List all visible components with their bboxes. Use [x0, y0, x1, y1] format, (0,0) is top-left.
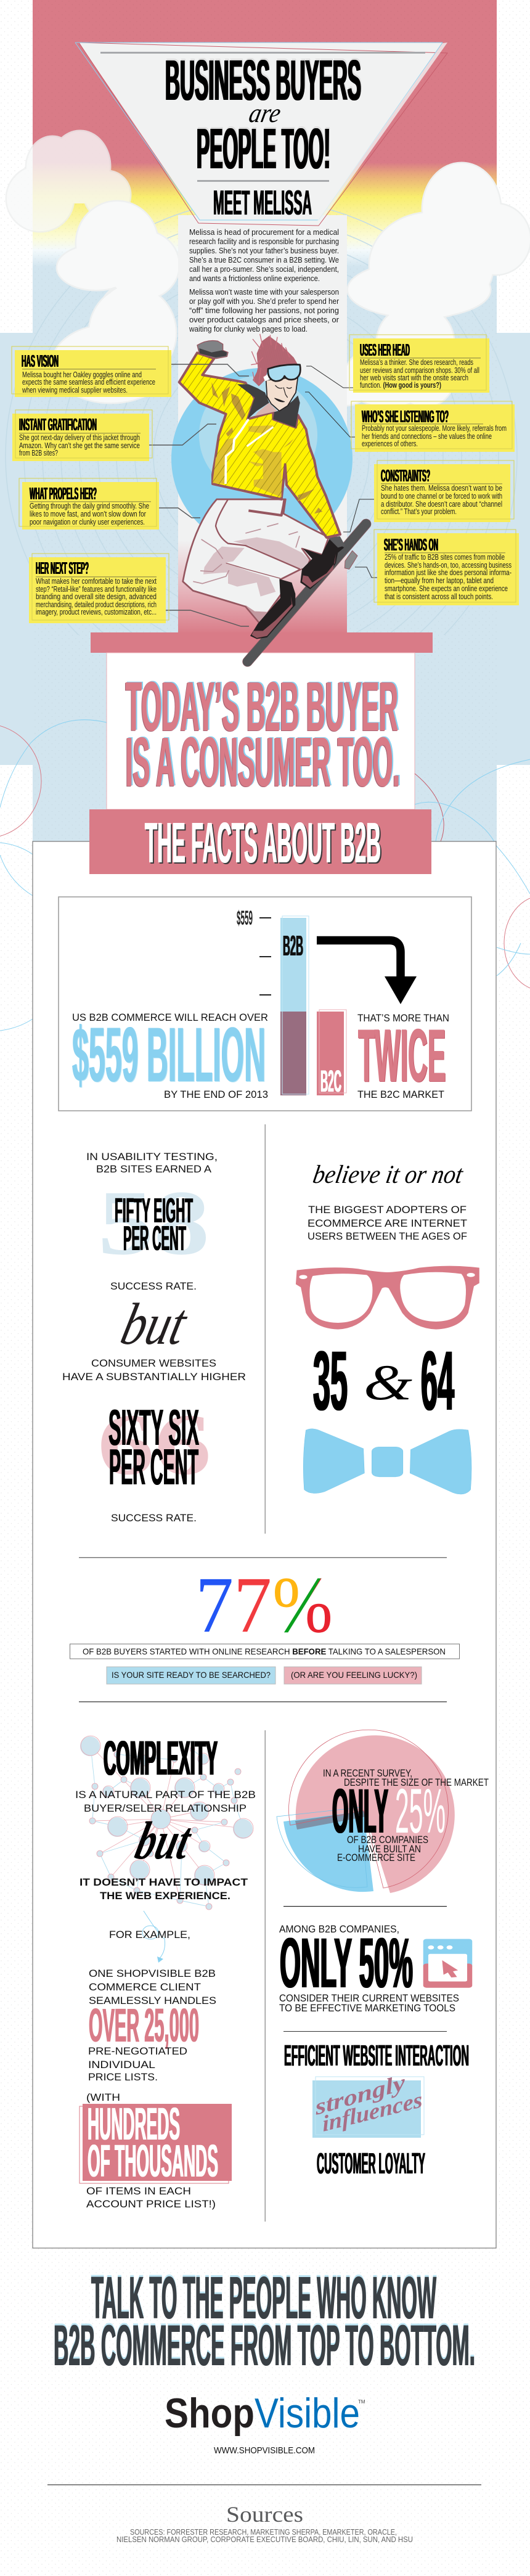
- callout: she's hands on: SHE’S HANDS ON: [384, 535, 438, 554]
- sources: Sources: [226, 2502, 303, 2527]
- title rule top: [100, 52, 425, 54]
- stat right: THAT’S MORE THAN: [357, 1012, 449, 1024]
- text: complexity: IT DOESN’T HAVE TO IMPACT: [80, 1876, 248, 1888]
- callout: instant gratification: She got next-day delivery of this jacket through: [19, 433, 140, 442]
- title: business buyers are people too: are: [247, 97, 283, 128]
- pie text: IN A RECENT SURVEY,: [323, 1767, 412, 1779]
- goggles: [268, 364, 300, 381]
- callout: uses her head: Melissa’s a thinker. She does research, reads: [360, 358, 473, 367]
- left lower clouds: [52, 202, 179, 403]
- text: complexity: [75, 1730, 256, 1902]
- callout: uses her head: USES HER HEAD: [360, 340, 410, 359]
- stat: only 50 percent: CONSIDER THEIR CURRENT WEBSITES: [279, 1992, 459, 2004]
- intro text: call her a pro-sumer. She’s social, independent,: [189, 264, 339, 274]
- callout: her next step: What makes her comfortable to take the next: [36, 577, 157, 586]
- text: complexity: THE WEB EXPERIENCE.: [100, 1890, 230, 1902]
- icon: bow tie: [303, 1429, 471, 1494]
- callout: has vision: expects the same seamless and efficient experience: [22, 378, 155, 386]
- panel: strongly influences: influences: [322, 2087, 423, 2136]
- intro text: [189, 227, 340, 333]
- stat: usability testing: IN USABILITY TESTING,: [86, 1151, 218, 1163]
- axis labels and ticks: $559: [237, 907, 253, 929]
- text: OVER 25,000: [89, 1999, 199, 2052]
- stat: usability testing: FIFTY EIGHT: [115, 1191, 193, 1230]
- stat: adopters: USERS BETWEEN THE AGES OF: [308, 1230, 467, 1242]
- callout: her next step: step? “Retail-like” features and functionality like: [36, 585, 157, 594]
- stat: usability testing: B2B SITES EARNED A: [96, 1163, 212, 1175]
- text: OF THOUSANDS: [88, 2135, 218, 2186]
- rule right lower: [283, 2031, 447, 2032]
- sources: SOURCES: FORRESTER RESEARCH, MARKETING SHERPA, EMARKETER, ORACLE,: [130, 2527, 397, 2537]
- facts panel: [33, 841, 496, 2248]
- callout: who's she listening to: experiences of others.: [362, 440, 418, 448]
- face: [263, 374, 298, 411]
- panel: strongly influences: [312, 2069, 424, 2138]
- right clouds: [320, 163, 530, 407]
- stat: usability testing: SIXTY SIX: [108, 1399, 199, 1456]
- stat: usability testing: PER CENT: [109, 1438, 198, 1495]
- stat: usability testing: SUCCESS RATE.: [111, 1512, 197, 1524]
- intro text: “off” time following her passions, not poring: [189, 306, 339, 315]
- intro text: Melissa is head of procurement for a medical: [189, 227, 339, 237]
- divider lower: [265, 1730, 266, 2222]
- research caption box: OF B2B BUYERS STARTED WITH ONLINE RESEARCH BEFORE TALKING TO A SALESPERSON: [83, 1646, 446, 1656]
- stat: adopters: THE BIGGEST ADOPTERS OF: [308, 1204, 467, 1216]
- callout: has vision: Melissa bought her Oakley goggles online and: [22, 370, 142, 379]
- button: searched: [107, 1667, 275, 1684]
- ages number: [313, 1334, 454, 1428]
- text: example: FOR EXAMPLE,: [109, 1929, 190, 1940]
- intro text: waiting for clunky web pages to load.: [189, 324, 308, 333]
- text: account lists: [86, 2185, 216, 2210]
- callout: constraints: conflict.” That’s your problem.: [381, 507, 457, 516]
- stat: 77 percent: 7: [234, 1561, 272, 1650]
- pie text: HAVE BUILT AN: [358, 1843, 421, 1855]
- panel: chart b2b vs b2c: B2B: [283, 930, 303, 962]
- b2c bar: [317, 1010, 346, 1098]
- rule between sections: [79, 1701, 447, 1703]
- callout: uses her head: her web visits start with the onsite search: [360, 374, 468, 382]
- callout: what propels her: WHAT PROPELS HER?: [30, 484, 97, 503]
- intro text: supplies. She’s not your father’s business buyer.: [189, 246, 339, 255]
- icon: browser window: [423, 1939, 472, 1988]
- callout: instant gratification: from B2B sites?: [19, 449, 58, 457]
- pants: [183, 499, 328, 624]
- callout: she's hands on: [374, 530, 519, 605]
- text: example: COMMERCE CLIENT: [89, 1981, 201, 1993]
- intro text: research facility and is responsible for purchasing: [189, 237, 339, 246]
- figure: snowboarder: [179, 334, 366, 661]
- title trapezoid: [75, 43, 447, 226]
- neck: [255, 403, 277, 416]
- icon: glasses: [296, 1266, 479, 1330]
- stat: adopters: believe it or not: [311, 1160, 466, 1189]
- text: example: PRE-NEGOTIATED: [88, 2045, 187, 2057]
- callout: her next step: imagery, product reviews, customization, etc...: [36, 608, 157, 616]
- rule right upper: [283, 1906, 447, 1907]
- callout: what propels her: [19, 478, 159, 530]
- callout: her next step: branding and overall site design, advanced: [36, 592, 157, 601]
- callout: has vision: [12, 346, 171, 397]
- text: example: (WITH: [86, 2091, 120, 2103]
- closing headline: [54, 2262, 475, 2378]
- website url: WWW.SHOPVISIBLE.COM: [214, 2445, 315, 2456]
- callout: instant gratification: Amazon. Why can’t she get the same service: [19, 441, 140, 450]
- stat left: US B2B COMMERCE WILL REACH OVER: [72, 1012, 268, 1023]
- stat: only 50 percent: [279, 1923, 459, 2014]
- centre panel behind figure: [178, 215, 347, 634]
- callout: has vision: HAS VISION: [22, 351, 59, 370]
- button: searched: IS YOUR SITE READY TO BE SEARCHED?: [112, 1670, 271, 1680]
- callout: what propels her: Getting through the daily grind smoothly. She: [30, 502, 149, 510]
- callout: she's hands on: tion—equally from her laptop, tablet and: [385, 576, 494, 585]
- pink banner under figure: [91, 632, 433, 653]
- callout: uses her head: user reviews and comparison shops. 30% of all: [360, 366, 479, 375]
- title: business buyers are people too: [165, 46, 362, 181]
- stat: usability testing: HAVE A SUBSTANTIALLY HIGHER: [62, 1371, 246, 1383]
- callout: her next step: [29, 554, 169, 623]
- callout: what propels her: poor navigation or clunky user experiences.: [30, 518, 145, 526]
- button: lucky: [284, 1667, 422, 1684]
- connector lines: [149, 364, 377, 626]
- callout: constraints: CONSTRAINTS?: [381, 466, 430, 485]
- logo: shopvisible: ShopVisible: [165, 2390, 360, 2437]
- intro text: She’s a true B2C consumer in a B2B setting. We: [189, 255, 339, 264]
- board: [248, 524, 366, 661]
- intro text: over product catalogs and price sheets, or: [189, 315, 340, 324]
- boots: [250, 536, 345, 639]
- sky column background: [0, 0, 530, 842]
- stat: adopters: [296, 1160, 479, 1494]
- callout: uses her head: [349, 335, 489, 393]
- text: example: INDIVIDUAL: [88, 2059, 155, 2071]
- sources: [116, 2502, 413, 2544]
- callout: who's she listening to: [351, 401, 515, 452]
- callout: she's hands on: that is consistent across all touch points.: [385, 592, 493, 601]
- 58 watermark: 58: [98, 1172, 210, 1274]
- callout: constraints: She hates them. Melissa doesn’t want to be: [381, 484, 502, 493]
- arrow: [317, 941, 417, 1004]
- stat: usability testing: SUCCESS RATE.: [110, 1280, 197, 1292]
- text: account lists: ACCOUNT PRICE LIST!): [86, 2198, 216, 2210]
- intro text: and wants a frictionless online experience.: [189, 274, 320, 283]
- stat: usability testing: CONSUMER WEBSITES: [91, 1357, 216, 1369]
- hand fingers behind board: [344, 550, 357, 569]
- b2b bar: [280, 916, 309, 1095]
- stat: adopters: ECOMMERCE ARE INTERNET: [308, 1217, 467, 1229]
- 66 watermark: 66: [97, 1396, 211, 1493]
- callout: what propels her: likes to move fast, and won’t slow down for: [30, 510, 146, 518]
- stat: usability testing: but: [115, 1291, 194, 1357]
- text: MEET MELISSA: [213, 183, 312, 223]
- stat: 77 percent: 7: [195, 1561, 234, 1650]
- stat right: THE B2C MARKET: [357, 1089, 444, 1100]
- ages number: 35: [313, 1334, 348, 1428]
- decorative circles: [0, 720, 530, 1031]
- stat: only 50 percent: AMONG B2B COMPANIES,: [279, 1923, 399, 1935]
- ages number: &: [364, 1354, 412, 1410]
- stat: usability testing: PER CENT: [123, 1219, 186, 1258]
- stat: 77 percent: [195, 1561, 333, 1650]
- panel: chart b2b vs b2c: [59, 897, 471, 1111]
- panel: chart b2b vs b2c: B2C: [320, 1064, 341, 1098]
- collar: [237, 384, 300, 427]
- sources: NIELSEN NORMAN GROUP, CORPORATE EXECUTIVE BOARD, CHIU, LIN, SUN, AND HSU: [116, 2535, 413, 2544]
- pie text: 25%: [395, 1776, 446, 1846]
- left top cloud: [7, 131, 130, 231]
- callout: instant gratification: [12, 410, 152, 461]
- panel: strongly influences: strongly: [313, 2069, 407, 2120]
- text: example: SEAMLESSLY HANDLES: [89, 1995, 216, 2006]
- side decorative circles right: [497, 846, 530, 991]
- jacket: [179, 353, 340, 538]
- stat right: [357, 1012, 449, 1100]
- research caption box: [70, 1644, 460, 1659]
- text: complexity: IS A NATURAL PART OF THE B2B: [75, 1789, 256, 1801]
- text: example: PRICE LISTS.: [88, 2071, 158, 2083]
- callout: instant gratification: INSTANT GRATIFICATION: [19, 415, 97, 434]
- divider upper: [265, 1124, 266, 1534]
- panel: hundreds of thousands: HUNDREDS: [88, 2098, 180, 2149]
- panel: hundreds of thousands: [80, 2098, 232, 2186]
- button: lucky: (OR ARE YOU FEELING LUCKY?): [291, 1670, 417, 1680]
- network graphic: [80, 1736, 253, 1910]
- callout: has vision: when viewing medical supplier websites.: [22, 386, 128, 395]
- intro text: Melissa won’t waste time with your salesperson: [189, 287, 339, 296]
- rule between sections: [79, 1557, 447, 1558]
- intro text: or play golf with you. She’d prefer to spend her: [189, 296, 340, 306]
- stat left: BY THE END OF 2013: [164, 1089, 268, 1100]
- stat: adopters: 64: [421, 1334, 454, 1428]
- arrow: squiggle: [142, 1911, 165, 1963]
- pie text: E-COMMERCE SITE: [337, 1852, 415, 1863]
- callout: her next step: HER NEXT STEP?: [36, 558, 89, 578]
- pie text: ONLY: [332, 1776, 388, 1846]
- stat: 77 percent: %: [272, 1561, 333, 1650]
- stat left: [72, 1012, 268, 1100]
- title rule bottom: [197, 180, 329, 182]
- pie chart: [277, 1730, 455, 1893]
- mask rows outside blue band: [0, 0, 530, 845]
- text: COMPLEXITY: [104, 1730, 218, 1785]
- text: complexity: BUYER/SELER RELATIONSHIP: [84, 1802, 247, 1814]
- pie text: DESPITE THE SIZE OF THE MARKET: [344, 1777, 489, 1788]
- headline: today's b2b buyer: [125, 667, 401, 801]
- pie text: OF B2B COMPANIES: [347, 1834, 428, 1846]
- callout: her next step: merchandising, detailed product descriptions, rich: [36, 600, 157, 609]
- blue circle behind figure: [171, 368, 353, 549]
- hair: [251, 334, 298, 386]
- logo: shopvisible: TM: [358, 2399, 365, 2405]
- text: example: ONE SHOPVISIBLE B2B: [89, 1968, 216, 1979]
- text: account lists: OF ITEMS IN EACH: [86, 2185, 191, 2197]
- banner: the facts about b2b: [89, 809, 431, 876]
- callout: constraints: [374, 460, 514, 522]
- stat: only 50 percent: TO BE EFFECTIVE MARKETING TOOLS: [279, 2002, 455, 2014]
- callout: uses her head: function. (How good is yours?): [360, 381, 441, 390]
- glove raised: [197, 340, 228, 359]
- text: complexity: but: [130, 1811, 198, 1871]
- stat: usability testing: [62, 1151, 246, 1524]
- pie text: [323, 1767, 489, 1863]
- text: example: [86, 1929, 216, 2103]
- white headline panel: [107, 653, 415, 809]
- footer rule: [47, 2484, 481, 2485]
